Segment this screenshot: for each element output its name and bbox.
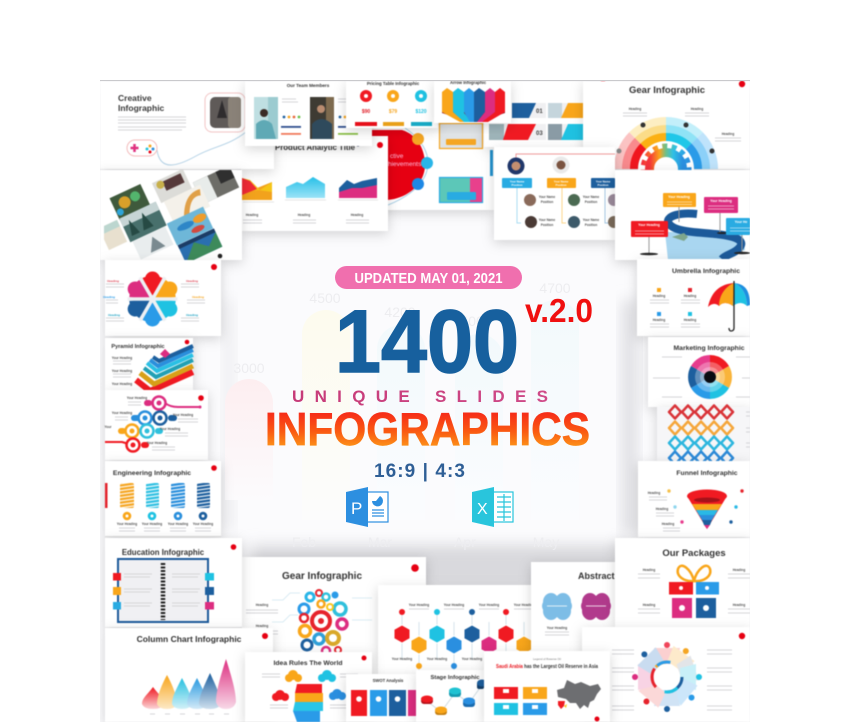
photo tile	[205, 93, 245, 132]
slide: arrow infographic	[434, 80, 511, 123]
slide: road signs: Your He	[735, 220, 747, 224]
slide: circular puzzle	[582, 627, 750, 722]
photo: person two	[310, 97, 334, 139]
pricing columns	[355, 90, 432, 126]
slide: pyramid infographic	[105, 338, 193, 391]
slide: abstract infographic: Your Heading	[547, 626, 567, 630]
slide: product analytic title: Heading	[246, 213, 258, 217]
slide: saudi arabia map	[484, 651, 610, 722]
icon: powerpoint	[346, 487, 388, 527]
slide: umbrella infographic	[637, 259, 750, 336]
slide: org chart: Your Name	[539, 218, 556, 222]
colour cards	[494, 687, 547, 715]
striped columns	[120, 483, 210, 508]
slide: flower infographic: Heading	[103, 295, 115, 299]
icon: powerpoint: P	[351, 499, 362, 518]
map of asia	[557, 680, 601, 709]
faded background bar chart: 4700	[539, 280, 571, 296]
slide: engineering infographic: Your Heading	[168, 522, 188, 526]
slide: marketing infographic: Marketing Infographic	[674, 345, 745, 352]
slide: gear infographic top: Heading	[691, 107, 703, 111]
slide: pricing table	[346, 81, 438, 128]
slide: road signs: Your Heading	[710, 199, 732, 203]
slide: idea rules the world: Idea Rules The World	[274, 660, 342, 667]
slide: pyramid infographic: Your Heading	[112, 382, 132, 386]
slide: packages: Heading	[643, 603, 655, 607]
icon: game controller	[127, 132, 246, 165]
subtitle: unique slides: UNIQUE SLIDES	[292, 387, 548, 406]
slide: org chart: Your Name	[539, 195, 556, 199]
slide: umbrella infographic: Heading	[684, 294, 696, 298]
slide: packages: Heading	[733, 568, 745, 572]
icon: excel	[472, 487, 513, 527]
slide: achievements: ctive	[390, 153, 404, 160]
slide: umbrella infographic: Heading	[684, 318, 696, 322]
name boxes: Your Name	[510, 180, 525, 184]
name boxes: Position	[555, 183, 567, 187]
slide: org chart: Your Name	[583, 218, 600, 222]
heading: creative infographic: Creative	[118, 93, 152, 103]
name boxes: Your Name	[596, 180, 611, 184]
slide: funnel infographic	[638, 461, 750, 537]
flower chart	[124, 272, 181, 326]
slide: packages	[615, 538, 750, 627]
pricing columns: $120	[415, 109, 427, 115]
faded background bar chart: May	[533, 534, 559, 550]
faded background bar chart	[225, 280, 579, 550]
notebook	[113, 559, 214, 622]
river	[665, 232, 745, 260]
heading: saudi arabia: Saudi Arabia has the Largest Oil Reserve in Asia	[496, 664, 599, 670]
slide: engineering infographic: Your Heading	[193, 522, 213, 526]
slide: gear infographic top: Heading	[722, 132, 734, 136]
slide: flower infographic: Heading	[186, 279, 198, 283]
funnel chart	[687, 490, 727, 529]
slide: pyramid infographic: Your Heading	[112, 356, 132, 360]
faded background bar chart: 3000	[233, 360, 265, 376]
gear half-ring chart	[614, 116, 718, 171]
pricing columns: $90	[362, 109, 370, 115]
slide: marketing infographic	[648, 337, 750, 407]
slide: numbered parallelograms: 03	[536, 131, 543, 137]
slide: product analytic title: Heading	[351, 213, 363, 217]
slide: education infographic: Education Infographic	[122, 548, 205, 557]
slide: timeline: Your Heading	[173, 413, 193, 417]
slide: timeline: Your Heading	[112, 411, 132, 415]
hexagons	[394, 625, 532, 654]
slide: gear head: Heading	[256, 624, 268, 628]
slide: hexagon timeline: Your Heading	[479, 603, 499, 607]
slide: funnel infographic: Heading	[648, 491, 660, 495]
slide: timeline	[104, 390, 208, 460]
timeline nodes	[105, 396, 202, 452]
slide: org chart	[494, 147, 620, 240]
slide: product analytic title: Heading	[298, 213, 310, 217]
area chart 3	[339, 178, 377, 198]
faded background bar chart: Apr	[454, 534, 476, 550]
slide: funnel infographic: Heading	[656, 507, 668, 511]
slide: flower infographic: Heading	[107, 279, 119, 283]
slide: column chart infographic: Column Chart Infographic	[137, 634, 242, 644]
slide: flower infographic: Heading	[192, 295, 204, 299]
abstract shape magenta	[581, 593, 611, 620]
slide: road signs: Your Heading	[668, 195, 690, 199]
slide: arrow infographic: Arrow Infographic	[450, 80, 487, 85]
slide: numbered parallelograms: 01	[536, 109, 543, 115]
signposts	[649, 207, 742, 253]
wheel chart	[688, 355, 732, 399]
version label: v.2.0	[525, 292, 593, 329]
area chart 1	[242, 178, 272, 200]
slide: umbrella infographic: Umbrella Infographic	[672, 268, 740, 275]
slide: timeline: Your Heading	[160, 427, 180, 431]
slide: engineering infographic: Your Heading	[117, 522, 137, 526]
slide: org chart: Your Name	[583, 195, 600, 199]
heading: gear infographic: Gear Infographic	[629, 85, 705, 96]
slide collage	[99, 80, 750, 722]
title: 1400: 1400	[335, 291, 519, 391]
slide: org chart: Position	[541, 200, 553, 204]
badge: updated date	[335, 266, 522, 289]
slide: pyramid infographic: Your Heading	[112, 369, 132, 373]
slide: photo collage	[99, 166, 242, 264]
slide: org chart: Position	[585, 223, 597, 227]
pyramid stripes	[136, 346, 193, 391]
name boxes: Position	[597, 183, 609, 187]
icon: umbrella	[708, 281, 750, 331]
slide: column chart infographic	[105, 628, 273, 722]
slide: funnel infographic: Funnel Infographic	[676, 470, 738, 477]
slide: packages: Our Packages	[662, 548, 726, 559]
faded background bar chart: 4200	[384, 304, 416, 320]
slide: hexagon timeline: Your Heading	[462, 657, 482, 661]
slide: umbrella infographic: Heading	[653, 294, 665, 298]
slide: hexagon timeline: Your Heading	[514, 603, 534, 607]
droplet chart	[142, 659, 236, 709]
faded background bar chart: Feb	[292, 534, 316, 550]
slide: pyramid infographic: Pyramid Infographic	[111, 344, 165, 350]
slide: flower infographic	[103, 260, 221, 336]
faded background bar chart: Mar	[368, 534, 392, 550]
slide: gear infographic top: Heading	[629, 107, 641, 111]
slide: flower infographic: Heading	[108, 313, 120, 317]
slide: numbered parallelograms	[484, 80, 610, 147]
slide: gear infographic top	[578, 81, 750, 171]
slide: team members: Our Team Members	[287, 83, 330, 88]
aspect ratios: 16:9 | 4:3	[374, 461, 465, 482]
slide: engineering infographic: Your Heading	[142, 522, 162, 526]
slide: team members	[245, 81, 372, 146]
slide: gear head: Heading	[256, 603, 268, 607]
slide: education infographic	[105, 538, 242, 627]
slide: road signs: Your Heading	[638, 223, 660, 227]
slide: org chart: Position	[541, 223, 553, 227]
heading: creative infographic: Infographic	[118, 103, 165, 113]
photo: person one	[254, 97, 278, 139]
icon: excel: X	[477, 501, 488, 518]
slide: timeline: Your Heading	[147, 441, 167, 445]
slide: creative infographic	[100, 81, 274, 169]
slide: funnel infographic: Heading	[662, 522, 674, 526]
heading: product analytic title: Product Analytic Title	[275, 142, 355, 152]
name boxes: Your Name	[554, 180, 569, 184]
slide: achievements	[370, 124, 494, 210]
title: infographics: INFOGRAPHICS	[265, 403, 590, 455]
slide: idea rules the world	[245, 652, 372, 722]
slide: hexagon timeline: Your Heading	[444, 603, 464, 607]
slide: packages: Heading	[733, 603, 745, 607]
circular arrow chart	[632, 641, 702, 712]
slide: saudi arabia map: Legend of Reserve Oil	[533, 657, 561, 661]
slide: hexagon timeline: Your Heading	[409, 603, 429, 607]
background panel	[100, 80, 750, 722]
faded background bar chart: 4500	[309, 290, 341, 306]
head stack	[293, 684, 323, 722]
slide: numbered parallelograms: 04	[595, 131, 602, 137]
slide: pricing table: Pricing Table Infographic	[367, 81, 420, 86]
portraits	[508, 156, 570, 174]
faded background bar chart: 4000	[460, 313, 492, 329]
slide: timeline: Your	[104, 425, 112, 429]
slide: stage infographic: Stage Infographic	[431, 675, 480, 681]
slide: gear head: Gear Infographic	[282, 571, 362, 582]
gear head chart	[299, 590, 347, 655]
slide: road signs	[615, 170, 750, 260]
slide: abstract infographic	[531, 562, 666, 654]
connectors	[402, 612, 524, 670]
slide: diamonds	[657, 406, 750, 464]
small icons	[657, 288, 692, 316]
badge: updated date: UPDATED MAY 01, 2021	[354, 270, 502, 287]
slide: hexagon timeline	[378, 585, 584, 675]
slide: hexagon timeline: Your Heading	[427, 657, 447, 661]
pricing columns: $79	[389, 109, 397, 115]
slide: numbered parallelograms: 02	[595, 109, 602, 115]
area chart 2	[286, 177, 325, 198]
slide: engineering infographic	[105, 461, 221, 537]
slide: stage infographic	[416, 670, 487, 722]
road	[668, 213, 741, 259]
slide: swot analysis	[346, 674, 416, 722]
icon: gift box	[669, 566, 719, 618]
slide: flower infographic: Heading	[186, 313, 198, 317]
slide: engineering infographic: Engineering Infographic	[113, 470, 191, 477]
stage cylinders	[421, 680, 487, 715]
name boxes: Position	[511, 183, 523, 187]
slide: packages: Heading	[643, 568, 655, 572]
name boxes	[502, 178, 615, 188]
column icons	[123, 512, 207, 520]
slide: umbrella infographic: Heading	[653, 318, 665, 322]
slide: gear head	[242, 557, 426, 702]
clouds	[272, 670, 346, 701]
slide: swot analysis: SWOT Analysis	[373, 678, 404, 683]
slide: org chart: Position	[585, 200, 597, 204]
slide: achievements: hievements	[388, 161, 422, 168]
slide: hexagon timeline: Your Heading	[392, 657, 412, 661]
abstract shape blue	[542, 593, 572, 620]
slide: timeline: Your Heading	[127, 396, 147, 400]
slide: abstract infographic: Abstract Infographic	[578, 571, 666, 581]
slide: product analytic title	[241, 136, 388, 231]
